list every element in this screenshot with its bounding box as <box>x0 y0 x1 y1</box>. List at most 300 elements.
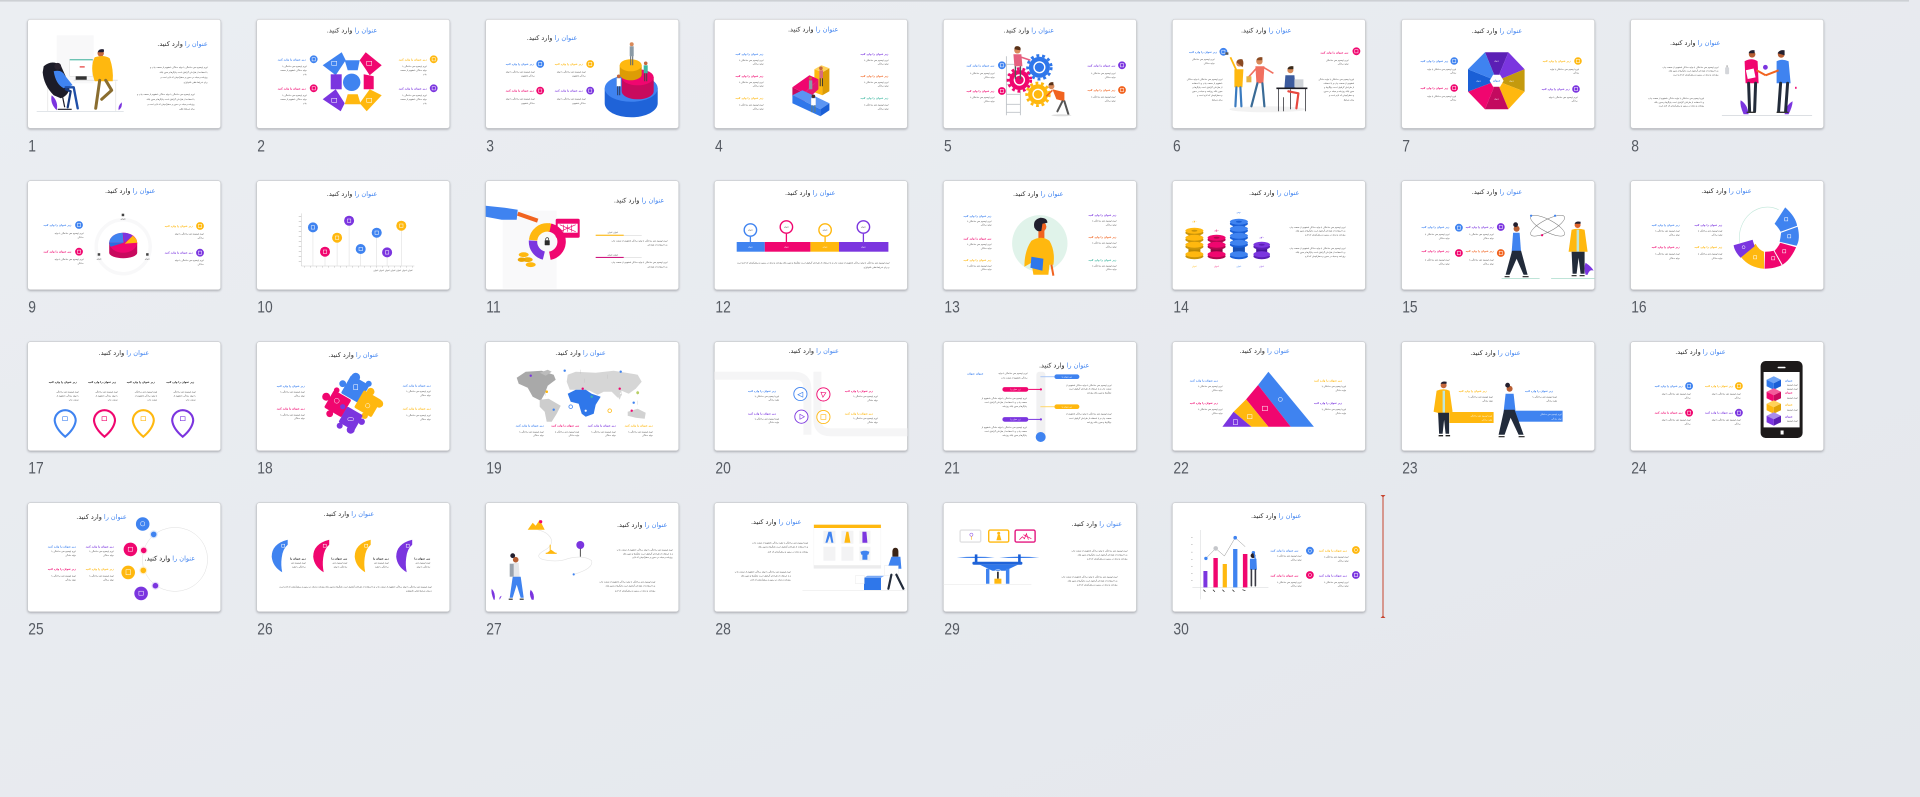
text block <box>1289 226 1346 237</box>
text block <box>1318 78 1355 102</box>
item: yellow <box>735 97 764 110</box>
text block: صنعت چاپ و با استفاده از طراحان گرافیک است <box>1069 388 1112 391</box>
item: orange <box>860 75 889 88</box>
item: purple: تولید سادگی <box>878 63 889 66</box>
item: blue: لورم ایپسوم متن ساختگی با <box>1277 555 1302 558</box>
item: yellow: سادگی <box>1573 72 1579 75</box>
item: purple: زیر عنوان را وارد کنید <box>1088 214 1117 217</box>
text block: با استفاده از طراحان گرافیک است چاپگرها و متون بلکه <box>160 71 208 74</box>
illustration: phone with cubes: لورم ایپسوم <box>1787 388 1798 391</box>
slide number: 23 <box>1402 459 1418 478</box>
item: pink: سادگی <box>1450 99 1456 102</box>
item: yellow <box>1459 390 1493 403</box>
title: عنوان را وارد کنید. <box>1472 188 1522 196</box>
item: blue <box>516 424 544 437</box>
timeline pins: عنوان <box>784 246 789 249</box>
stacked discs chart: عنوان <box>1214 265 1220 268</box>
item: blue <box>506 60 544 78</box>
item: yellow: تولید سادگی <box>1338 559 1349 562</box>
item: pink: لورم ایپسوم متن ساختگی با <box>554 430 580 433</box>
item: purple: لورم ایپسوم متن ساختگی با <box>1091 72 1116 75</box>
title: عنوان را وارد کنید. <box>527 34 577 42</box>
item: yellow: زیر عنوان را وارد کنید <box>555 63 583 66</box>
slide number: 22 <box>1173 459 1189 478</box>
world map with pins <box>517 370 646 422</box>
item: yellow: سادگی نامفهوم <box>572 75 586 78</box>
item: pink <box>1420 84 1458 102</box>
stacked discs chart <box>1185 211 1270 268</box>
slide number: 19 <box>486 459 502 478</box>
item: pink <box>1655 409 1693 425</box>
text block: لورم ایپسوم متن ساختگی با تولید سادگی نامفهوم از صنعت چاپ و با استفاده از طراحان گرافیک است چاپگرها و متون بلکه روزنامه و مجله در ستون و سطرآنچنان که لازم است <box>279 585 432 588</box>
slide 25 thumbnail <box>28 503 221 639</box>
item: orange: تولید سادگی <box>1105 99 1116 102</box>
crescent yellow <box>355 540 389 572</box>
text block: لورم ایپسوم متن ساختگی با تولید <box>998 372 1028 375</box>
item: purple: سادگی <box>1572 99 1578 102</box>
text block: لورم ایپسوم متن ساختگی با تولید سادگی نامفهوم از <box>981 426 1027 429</box>
octagon chart <box>1468 52 1525 109</box>
text block <box>752 541 808 553</box>
text block <box>599 581 656 592</box>
item: orange: تولید سادگی <box>1106 246 1117 249</box>
crescent blue: زیر عنوان را <box>290 558 306 561</box>
item: blue: زیر عنوان را وارد کنید <box>1270 549 1299 552</box>
slide 15 thumbnail <box>1402 181 1595 317</box>
title: عنوان را وارد کنید. <box>99 349 149 357</box>
item: blue: زیر عنوان را وارد کنید <box>966 64 995 67</box>
text block: چاپگرها و متون بلکه روزنامه <box>1002 434 1028 437</box>
item: blue: لورم ایپسوم متن ساختگی با <box>1198 385 1223 388</box>
item: purple <box>1319 571 1360 588</box>
item: yellow <box>1705 382 1743 400</box>
column 4 with pin <box>166 381 196 437</box>
item: yellow: لورم ایپسوم متن ساختگی با تولید <box>557 71 586 74</box>
item: purple: زیر عنوان را وارد کنید <box>1314 402 1342 405</box>
column 2 with pin: صنعت چاپ <box>108 399 118 402</box>
item: pink <box>506 87 544 105</box>
slide 2 thumbnail <box>257 19 450 156</box>
item: blue: تولید سادگی <box>1546 400 1557 403</box>
title: عنوان را وارد کنید. <box>1239 347 1290 355</box>
item: blue: زیر عنوان را وارد کنید <box>516 424 544 427</box>
item: yellow <box>165 222 204 239</box>
slide 11 thumbnail <box>486 181 679 317</box>
item: blue right: تولید سادگی <box>420 394 431 397</box>
text block: متون بلکه روزنامه و مجله در ستون <box>1324 90 1354 93</box>
stacked discs chart: ٪۳۰ <box>1259 236 1264 239</box>
item: purple <box>1694 224 1723 237</box>
item: pink bar: لورم ایپسوم متن ساختگی با تولید سادگی نامفهوم از صنعت چاپ <box>611 261 668 264</box>
text block: و سطرآنچنان که لازم است و <box>1328 94 1354 97</box>
slide 26 thumbnail <box>257 503 450 639</box>
item: pink: سادگی <box>77 262 84 265</box>
text block: برای شرایط فعلی <box>179 107 195 110</box>
octagon chart: عنوان <box>1493 80 1501 83</box>
slide number: 24 <box>1631 459 1647 478</box>
vertical timeline with pills: زیر عنوان را <box>1010 388 1021 391</box>
item: pink <box>1190 402 1223 415</box>
stacked discs chart: ٪۹۰ <box>1237 211 1242 214</box>
illustration: phone with cubes: عنوان <box>1785 404 1793 407</box>
column 3 with pin: صنعت چاپ <box>147 399 157 402</box>
text block: لورم ایپسوم متن ساختگی با تولید سادگی نامفهوم از صنعت چاپ <box>1061 575 1118 578</box>
text block: لورم ایپسوم متن ساختگی با تولید سادگی نامفهوم از صنعت چاپ <box>1071 549 1128 552</box>
item: blue: لورم ایپسوم متن ساختگی با <box>754 395 779 398</box>
orbit diagram <box>121 517 208 600</box>
crescent yellow: زیر عنوان را <box>373 558 389 561</box>
item: pink <box>963 237 992 250</box>
title: عنوان را وارد کنید. <box>1241 26 1292 34</box>
item: blue right: زیر عنوان را وارد کنید <box>403 384 431 387</box>
illustration: man with yellow banner: تولید سادگی <box>1482 419 1493 422</box>
slide 1 thumbnail <box>28 19 221 156</box>
text block: و برای شرایط فعلی تکنولوژی <box>406 590 432 593</box>
title: عنوان را وارد کنید. <box>105 187 156 195</box>
item: pink: لورم ایپسوم متن ساختگی با <box>1425 258 1450 261</box>
slide number: 20 <box>715 459 731 478</box>
3D pie chart: عنوان <box>97 258 102 261</box>
item: purple: لورم ایپسوم متن ساختگی با <box>754 417 779 420</box>
item: purple: لورم ایپسوم متن ساختگی با تولید <box>1549 96 1578 99</box>
item: yellow: سادگی <box>198 236 204 239</box>
item: blue <box>1420 57 1458 75</box>
illustration: online shop window <box>802 525 905 590</box>
item: blue <box>48 546 76 557</box>
item: purple: تولید سادگی <box>605 434 616 437</box>
slide 7 thumbnail <box>1402 19 1595 156</box>
item: yellow: تولید سادگی <box>1712 257 1723 260</box>
item: pink <box>277 407 305 420</box>
item: purple: زیر عنوان را وارد کنید <box>86 546 114 549</box>
item: pink <box>1320 47 1360 66</box>
text block: و با استفاده از طراحان گرافیک است چاپگرها و متون بلکه <box>1296 230 1345 233</box>
item: pink: زیر عنوان را وارد کنید <box>1655 412 1683 415</box>
item: yellow: لورم ایپسوم متن ساختگی با تولید <box>1712 393 1741 396</box>
item: pink: زیر عنوان را وارد کنید <box>966 90 995 93</box>
text block: متون بلکه روزنامه و مجله در ستون <box>1192 90 1222 93</box>
item: pink <box>551 424 580 437</box>
text block: و با استفاده از طراحان گرافیک است چاپگرها و متون بلکه <box>1296 251 1345 254</box>
item: blue: تولید سادگی <box>753 63 764 66</box>
text block: برای شرایط <box>1343 99 1355 102</box>
item: purple <box>1705 409 1743 425</box>
text block <box>998 372 1028 379</box>
text block: روزنامه و مجله در ستون و سطرآنچنان که لازم <box>632 556 673 559</box>
item: yellow: زیر عنوان را وارد کنید <box>1459 390 1487 393</box>
icon frames <box>960 530 1035 542</box>
item: yellow: لورم ایپسوم متن ساختگی با <box>739 104 764 107</box>
text block: نامفهوم از صنعت چاپ و با استفاده <box>1324 82 1355 85</box>
text block: روزنامه و مجله در ستون و سطرآنچنان که لازم <box>768 550 808 553</box>
item: purple: تولید سادگی <box>1712 234 1723 237</box>
item: blue: زیر عنوان را وارد کنید <box>1652 224 1680 227</box>
text block: روزنامه و مجله در ستون و سطرآنچنان که لازم است <box>1673 74 1718 77</box>
item: pink <box>43 248 84 265</box>
text block <box>1065 384 1112 395</box>
item: yellow: زیر عنوان را وارد کنید <box>403 407 431 410</box>
item: pink: زیر عنوان را وارد کنید <box>1652 246 1680 249</box>
slide 8 thumbnail <box>1631 19 1824 156</box>
title: عنوان را وارد کنید. <box>76 513 127 521</box>
item: yellow: زیر عنوان را وارد کنید <box>399 58 427 61</box>
slide number: 5 <box>944 138 952 156</box>
slide number: 12 <box>715 298 731 317</box>
item: blue: سادگی نامفهوم <box>521 75 535 78</box>
text block: لورم ایپسوم متن ساختگی با تولید سادگی نامفهوم از <box>1065 384 1112 387</box>
item: blue: لورم ایپسوم متن ساختگی با <box>519 430 544 433</box>
item: yellow bar: عنوان عنوان <box>608 231 619 234</box>
illustration: drone <box>943 554 1039 584</box>
slide number: 18 <box>257 459 273 478</box>
text block: روزنامه و مجله در ستون و سطرآنچنان که لازم است و <box>160 76 208 79</box>
text block: صنعت چاپ و با استفاده از طراحان گرافیک است <box>984 430 1027 433</box>
text block <box>735 571 791 582</box>
title: عنوان را وارد کنید. <box>1472 27 1522 35</box>
slide 24 thumbnail <box>1631 342 1824 478</box>
item: yellow <box>1319 546 1360 562</box>
item: yellow: تولید سادگی <box>753 107 764 110</box>
item: blue: لورم ایپسوم متن ساختگی با <box>1425 233 1450 236</box>
item: blue <box>278 55 318 76</box>
item: pink: زیر عنوان را وارد کنید <box>1420 87 1449 90</box>
item: teal: تولید سادگی <box>1106 268 1117 271</box>
slide number: 27 <box>486 620 502 639</box>
item: blue: زیر عنوان را وارد کنید <box>1190 379 1218 382</box>
item: pink: لورم ایپسوم متن ساختگی با <box>739 81 764 84</box>
item: orange <box>1088 236 1117 249</box>
slide number: 6 <box>1173 138 1181 156</box>
slide 4 thumbnail <box>714 19 907 156</box>
item: orange: لورم ایپسوم متن ساختگی با <box>1469 258 1494 261</box>
title: عنوان را وارد کنید. <box>785 189 836 197</box>
item: blue: سادگی <box>1450 72 1456 75</box>
crescent pink <box>313 540 348 572</box>
item: yellow: تولید سادگی <box>981 268 992 271</box>
stacked discs chart: ٪۵۰ <box>1214 229 1219 232</box>
item: pink: تولید سادگی <box>1212 412 1223 415</box>
text block: چاپگرها و متون بلکه روزنامه <box>1087 421 1112 424</box>
illustration: phone with cubes: لورم ایپسوم <box>1787 420 1798 423</box>
item: pink: زیر عنوان را وارد کنید <box>278 87 306 90</box>
timeline pins: عنوان <box>748 229 754 232</box>
title: عنوان را وارد کنید. <box>157 40 208 48</box>
item: pink: تولید سادگی <box>981 247 992 250</box>
item: pink <box>735 75 764 88</box>
item: blue: لورم ایپسوم متن ساختگی با تولید <box>1662 393 1691 396</box>
item: yellow: لورم ایپسوم متن ساختگی با <box>89 575 114 578</box>
text block: برای شرایط فعلی تکنولوژی <box>184 81 208 84</box>
vertical timeline with pills: زیر عنوان را <box>1010 418 1021 421</box>
item: yellow: زیر عنوان را وارد کنید <box>963 259 992 262</box>
text block <box>136 66 208 110</box>
item: pink: لورم ایپسوم متن ساختگی با <box>970 96 995 99</box>
item: pink bar <box>596 253 668 268</box>
item: purple: لورم ایپسوم متن ساختگی با تولید <box>175 259 204 262</box>
item: yellow: زیر عنوان را وارد کنید <box>86 568 114 571</box>
item: purple: زیر عنوان را وارد کنید <box>1087 64 1116 67</box>
title: عنوان را وارد کنید. <box>614 196 664 204</box>
item: purple: زیر عنوان را وارد کنید <box>165 252 193 255</box>
bar and line chart <box>1191 530 1268 599</box>
illustration: woman with blue banner <box>1499 383 1563 437</box>
item: yellow <box>1314 379 1347 392</box>
crescent yellow: ساختگی با تولید <box>375 565 389 568</box>
item: purple <box>588 424 616 437</box>
column 1 with pin: صنعت چاپ <box>69 399 79 402</box>
item: yellow: لورم ایپسوم متن ساختگی با <box>853 417 878 420</box>
item: yellow: لورم ایپسوم متن ساختگی با <box>1324 555 1349 558</box>
item: blue <box>735 53 764 66</box>
item: pink: تولید سادگی <box>1669 257 1680 260</box>
text block: لورم ایپسوم متن ساختگی با تولید سادگی نامفهوم از صنعت چاپ و <box>136 93 195 96</box>
3D pie chart: عنوان <box>145 258 151 261</box>
item: yellow <box>403 407 431 421</box>
slide 14 thumbnail <box>1172 181 1365 317</box>
text block: از طراحان گرافیک است چاپگرها و <box>1323 86 1355 89</box>
crescent blue: لورم ایپسوم متن <box>291 561 306 564</box>
title: عنوان را وارد کنید. <box>1675 348 1726 356</box>
orbit diagram: عنوان را وارد کنید. <box>145 555 195 563</box>
text block: و با استفاده از طراحان گرافیک است چاپگرها و متون بلکه <box>1078 554 1127 557</box>
slide 9 thumbnail <box>28 181 221 317</box>
text block: لورم ایپسوم متن ساختگی با تولید سادگی نامفهوم از <box>1065 413 1112 416</box>
segmented ring chart <box>1734 207 1799 269</box>
crescent purple: زیر عنوان را <box>414 558 431 561</box>
item: pink: لورم ایپسوم متن ساختگی با <box>967 243 992 246</box>
illustration: gears, ladder and two people <box>1006 46 1071 116</box>
text block <box>1648 97 1704 108</box>
item: yellow: لورم ایپسوم متن ساختگی با <box>1698 253 1723 256</box>
item: blue: تولید سادگی <box>533 434 544 437</box>
item: blue <box>1525 390 1557 403</box>
slide number: 1 <box>28 138 36 156</box>
text block: نامفهوم از صنعت چاپ و با استفاده <box>1192 82 1223 85</box>
item: purple: لورم ایپسوم متن ساختگی با <box>1324 581 1349 584</box>
text block: صنعت چاپ و با استفاده از طراحان گرافیک است <box>984 401 1027 404</box>
column 4 with pin: زیر عنوان را وارد کنید <box>166 381 195 384</box>
item: pink: زیر عنوان را وارد کنید <box>277 407 305 410</box>
item: orange: تولید سادگی <box>878 85 889 88</box>
item: purple <box>1466 223 1505 240</box>
item: pink <box>1652 246 1680 260</box>
illustration: woman with blue banner: لورم ایپسوم متن ساختگی <box>1540 413 1562 416</box>
item: pink: زیر عنوان را وارد کنید <box>43 251 72 254</box>
insertion marker <box>1380 495 1386 618</box>
text block: و با استفاده از طراحان گرافیک است چاپگرها و متون بلکه <box>741 575 791 578</box>
item: purple: تولید سادگی <box>1335 412 1347 415</box>
illustration: woman on trail map <box>491 520 592 600</box>
text block: لورم ایپسوم متن ساختگی با تولید سادگی نامفهوم از صنعت چاپ <box>1289 226 1346 229</box>
road band <box>714 372 907 435</box>
item: purple: تولید سادگی <box>1106 224 1117 227</box>
item: blue: زیر عنوان را وارد کنید <box>1655 385 1683 388</box>
item: pink <box>48 568 76 582</box>
item: blue: زیر عنوان را وارد کنید <box>278 58 306 61</box>
text block: روزنامه و مجله در ستون و سطرآنچنان که لازم است و <box>147 103 195 106</box>
column 4 with pin: صنعت چاپ <box>186 399 196 402</box>
slide number: 7 <box>1402 138 1410 156</box>
illustration: phone with cubes: عنوان <box>1785 392 1793 395</box>
slide 13 thumbnail <box>943 181 1136 317</box>
item: orange: تولید سادگی <box>1483 262 1494 265</box>
item: teal: زیر عنوان را وارد کنید <box>860 97 889 100</box>
item: orange: زیر عنوان را وارد کنید <box>1088 236 1117 239</box>
item: orange <box>1466 249 1505 265</box>
text block: لورم ایپسوم متن ساختگی با تولید سادگی نامفهوم از صنعت چاپ و <box>149 66 208 69</box>
text block: لورم ایپسوم متن ساختگی با تولید سادگی <box>1318 78 1354 81</box>
item: purple: زیر عنوان را وارد کنید <box>860 53 889 56</box>
illustration: phone with cubes <box>1761 361 1803 438</box>
item: orange: لورم ایپسوم متن ساختگی با <box>1092 242 1117 245</box>
text block <box>617 549 673 559</box>
item: yellow: لورم ایپسوم متن ساختگی با <box>967 264 992 267</box>
item: yellow: زیر عنوان را وارد کنید <box>735 97 764 100</box>
column 3 with pin <box>127 381 158 437</box>
item: orange: زیر عنوان را وارد کنید <box>1087 89 1116 92</box>
petal diagram <box>323 52 382 111</box>
item: purple: زیر عنوان را وارد کنید <box>588 424 616 427</box>
item: yellow: لورم ایپسوم متن ساختگی با تولید <box>175 232 204 235</box>
item: blue right: لورم ایپسوم متن ساختگی با <box>406 390 431 393</box>
item: pink: زیر عنوان را وارد کنید <box>1421 250 1450 253</box>
item: purple <box>86 546 114 557</box>
item: purple: زیر عنوان را وارد کنید <box>399 87 427 90</box>
item: orange: لورم ایپسوم متن ساختگی با <box>864 81 889 84</box>
item: yellow: زیر عنوان را وارد کنید <box>1319 549 1347 552</box>
slide number: 21 <box>944 459 960 478</box>
item: pink: لورم ایپسوم متن ساختگی با تولید <box>54 258 84 261</box>
illustration: isometric blocks <box>792 65 829 116</box>
item: blue: زیر عنوان را وارد کنید <box>1420 60 1449 63</box>
item: orange <box>1087 86 1126 102</box>
item: pink: لورم ایپسوم متن ساختگی با تولید <box>1427 95 1457 98</box>
crescent yellow: لورم ایپسوم متن <box>374 561 389 564</box>
slide number: 17 <box>28 459 44 478</box>
item: pink: لورم ایپسوم متن ساختگی با <box>51 575 76 578</box>
text block <box>1061 575 1118 587</box>
item: yellow: لورم ایپسوم متن ساختگی با <box>1468 396 1493 399</box>
item: blue: زیر عنوان را وارد کنید <box>506 63 534 66</box>
item: purple: لورم ایپسوم متن ساختگی با <box>402 94 427 97</box>
crescent pink: ساختگی با تولید <box>333 565 347 568</box>
item: blue: تولید سادگی <box>1204 62 1215 65</box>
title: عنوان را وارد کنید. <box>324 510 374 518</box>
text block: با استفاده از طراحان گرافیک است چاپگرها و متون بلکه <box>147 98 195 101</box>
timeline pins: عنوان <box>748 246 753 249</box>
item: pink: لورم ایپسوم متن ساختگی با <box>1198 408 1223 411</box>
item: blue: تولید سادگی <box>294 395 305 398</box>
text block: چاپگرها و متون بلکه روزنامه <box>1087 392 1112 395</box>
item: purple: لورم ایپسوم متن ساختگی با <box>1321 408 1346 411</box>
item: purple: تولید سادگی <box>1483 237 1494 240</box>
text block <box>1071 549 1128 561</box>
title: عنوان را وارد کنید. <box>327 190 377 198</box>
item: yellow: تولید سادگی <box>1482 400 1493 403</box>
item: purple: لورم ایپسوم متن ساختگی با <box>591 430 616 433</box>
item: blue: تولید سادگی <box>981 224 992 227</box>
item: blue: زیر عنوان را وارد کنید <box>48 546 76 549</box>
item: yellow: تولید سادگی <box>867 421 878 424</box>
item: pink bar: و با استفاده از طراحان <box>647 265 667 268</box>
item: purple: لورم ایپسوم متن ساختگی با تولید <box>557 98 586 101</box>
slide 5 thumbnail <box>943 19 1136 156</box>
item: purple: زیر عنوان را وارد کنید <box>555 89 583 92</box>
item: yellow: لورم ایپسوم متن ساختگی با <box>402 65 427 68</box>
slide 20 thumbnail <box>714 342 907 478</box>
item: pink: لورم ایپسوم متن ساختگی با <box>1655 253 1680 256</box>
item: pink: تولید سادگی <box>1439 262 1450 265</box>
